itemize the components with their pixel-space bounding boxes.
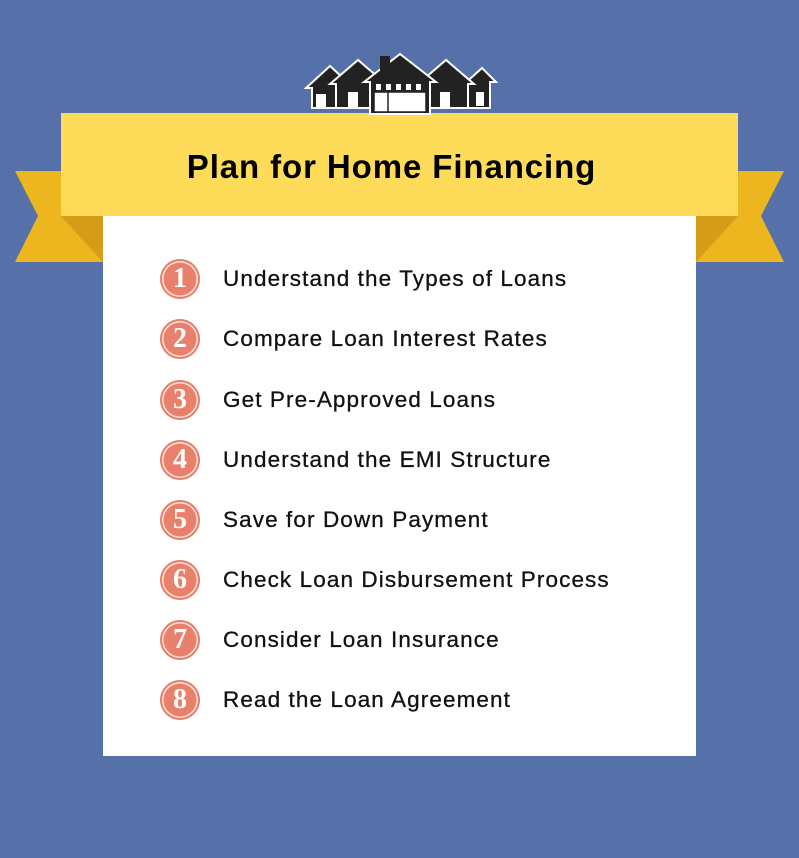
step 8: 8	[173, 684, 187, 715]
step 2: 2	[173, 323, 187, 354]
step 1	[160, 259, 567, 299]
title banner	[61, 113, 738, 216]
step 7: Consider Loan Insurance	[223, 627, 500, 652]
step 8: Read the Loan Agreement	[223, 687, 511, 712]
step 3: 3	[173, 384, 187, 415]
title: Plan for Home Financing	[187, 148, 596, 185]
step 4: Understand the EMI Structure	[223, 447, 551, 472]
right ribbon tail	[696, 171, 784, 262]
step 5: Save for Down Payment	[223, 507, 489, 532]
step 5: 5	[173, 504, 187, 535]
step 6: 6	[173, 564, 187, 595]
step 2	[160, 319, 548, 359]
step 3: Get Pre-Approved Loans	[223, 387, 496, 412]
panel: steps list	[103, 216, 696, 756]
step 5	[160, 500, 489, 540]
step 4: 4	[173, 444, 187, 475]
step 1: Understand the Types of Loans	[223, 266, 567, 291]
step 3	[160, 380, 496, 420]
step 6: Check Loan Disbursement Process	[223, 567, 610, 592]
step 7	[160, 620, 500, 660]
step 7: 7	[173, 624, 187, 655]
icon: houses	[304, 52, 498, 115]
step 8	[160, 680, 511, 720]
step 4	[160, 440, 551, 480]
step 2: Compare Loan Interest Rates	[223, 326, 548, 351]
step 1: 1	[173, 263, 187, 294]
left ribbon tail	[15, 171, 103, 262]
step 6	[160, 560, 610, 600]
